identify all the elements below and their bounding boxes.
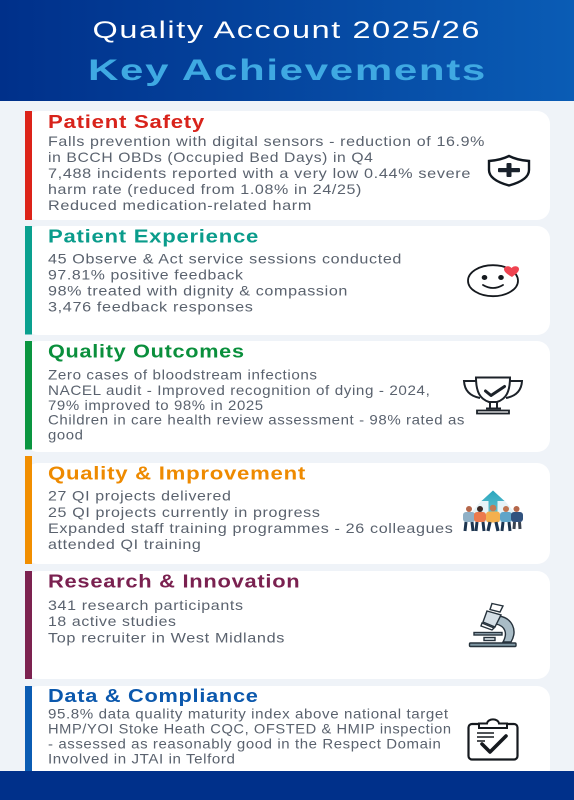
title: Quality Account 2025/26: Quality Account 2025/26	[92, 17, 481, 44]
person 1	[463, 506, 475, 531]
person 4	[500, 506, 512, 531]
heading: Patient Safety: Patient Safety	[48, 112, 205, 132]
text: Patient Experience achievements	[48, 251, 402, 315]
icon: smiley with heart	[468, 265, 519, 296]
text: Patient Safety achievements: 7,488 incidents reported with a very low 0.44% severe	[48, 165, 471, 181]
text: Patient Safety achievements: Reduced medication-related harm	[48, 197, 312, 213]
text: Research & Innovation achievements: 18 active studies	[48, 613, 177, 629]
text: Patient Safety achievements: in BCCH OBDs (Occupied Bed Days) in Q4	[48, 149, 374, 165]
text: Data & Compliance achievements: HMP/YOI Stoke Heath CQC, OFSTED & HMIP inspection	[48, 721, 452, 737]
panel: Quality & Improvement	[25, 456, 550, 564]
icon: trophy with check	[464, 378, 522, 414]
text: Patient Safety achievements: harm rate (reduced from 1.08% in 24/25)	[48, 181, 362, 197]
text: Quality & Improvement achievements: 25 QI projects currently in progress	[48, 504, 320, 520]
text: Quality Outcomes achievements	[48, 367, 465, 442]
text: Data & Compliance achievements: 95.8% data quality maturity index above national target	[48, 706, 449, 722]
panel: Patient Experience	[25, 226, 550, 335]
panel: Data & Compliance	[25, 686, 550, 782]
person 2	[474, 506, 486, 531]
text: Quality Outcomes achievements: Zero cases of bloodstream infections	[48, 367, 318, 383]
text: Quality Outcomes achievements: NACEL audit - Improved recognition of dying - 2024,	[48, 382, 430, 398]
text: Quality & Improvement achievements: Expanded staff training programmes - 26 colleagues	[48, 520, 454, 536]
text: Research & Innovation achievements	[48, 597, 285, 645]
heading: Data & Compliance: Data & Compliance	[48, 686, 259, 706]
text: Quality Outcomes achievements: good	[48, 426, 84, 442]
text: Research & Innovation achievements: Top recruiter in West Midlands	[48, 629, 285, 645]
heading: Research & Innovation: Research & Innovation	[48, 571, 300, 591]
header banner	[0, 0, 574, 101]
text: Quality & Improvement achievements	[48, 488, 454, 552]
panel: Quality Outcomes	[25, 341, 550, 452]
heading: Quality & Improvement: Quality & Improvement	[48, 463, 306, 483]
text: Patient Experience achievements: 97.81% positive feedback	[48, 266, 244, 282]
text: Patient Experience achievements: 3,476 feedback responses	[48, 299, 254, 315]
text: Quality Outcomes achievements: Children in care health review assessment - 98% rated as	[48, 412, 465, 428]
text: Patient Safety achievements	[48, 133, 485, 213]
text: Patient Experience achievements: 45 Observe & Act service sessions conducted	[48, 251, 402, 267]
text: Quality & Improvement achievements: 27 QI projects delivered	[48, 488, 232, 504]
footer bar	[0, 771, 574, 800]
text: Research & Innovation achievements: 341 research participants	[48, 597, 244, 613]
text: Data & Compliance achievements: - assessed as reasonably good in the Respect Domain	[48, 736, 441, 752]
heading: Quality Outcomes: Quality Outcomes	[48, 341, 245, 361]
person 3	[486, 505, 500, 531]
person 5	[511, 506, 523, 529]
heading: Key Achievements: Key Achievements	[88, 54, 487, 87]
panel: Patient Safety	[25, 111, 550, 220]
panel: Research & Innovation	[25, 571, 550, 679]
text: Quality & Improvement achievements: attended QI training	[48, 536, 202, 552]
text: Quality Outcomes achievements: 79% improved to 98% in 2025	[48, 397, 264, 413]
heading: Patient Experience: Patient Experience	[48, 227, 259, 247]
text: Data & Compliance achievements: Involved in JTAI in Telford	[48, 751, 236, 767]
text: Patient Safety achievements: Falls prevention with digital sensors - reduction of 16.9%	[48, 133, 485, 149]
icon: clipboard with check	[468, 719, 518, 760]
icon: shield with cross	[489, 156, 529, 186]
text: Data & Compliance achievements	[48, 706, 452, 767]
icon: microscope	[470, 604, 516, 646]
text: Patient Experience achievements: 98% treated with dignity & compassion	[48, 282, 348, 298]
icon: team with upward arrow	[463, 490, 523, 531]
